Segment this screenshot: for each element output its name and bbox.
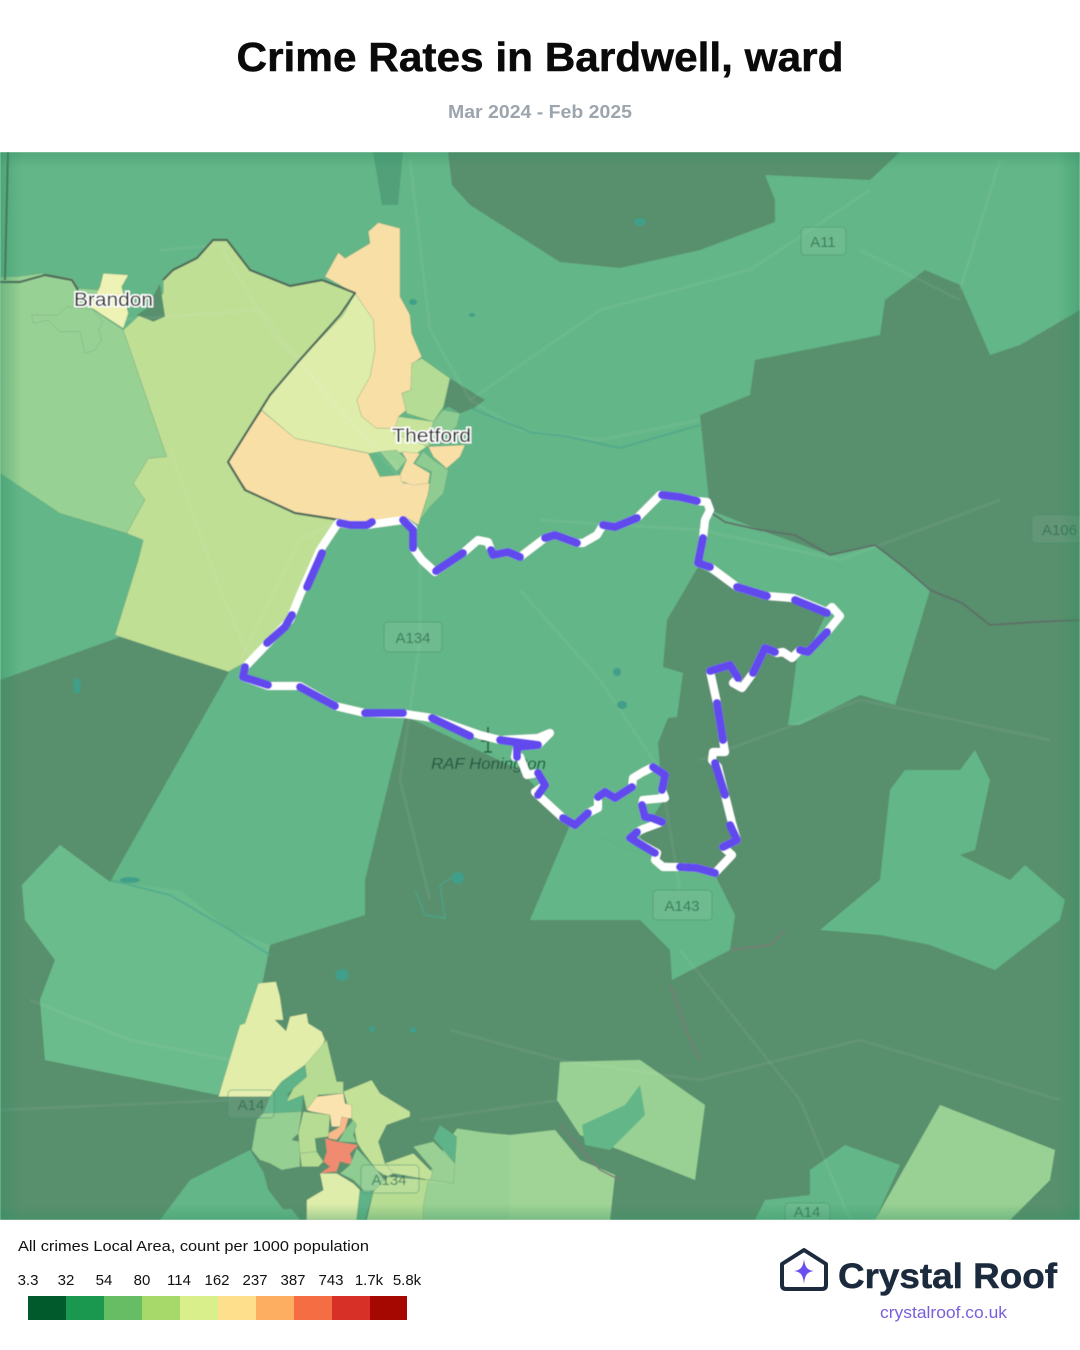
region: Thetford pale strip xyxy=(393,417,433,447)
legend: tick labels: 80 xyxy=(134,1272,150,1289)
region: Brandon town xyxy=(90,273,128,328)
road shield: A11: A11 xyxy=(810,234,836,251)
road shield: A134 south: A134 xyxy=(371,1172,407,1189)
region: Thetford east green xyxy=(402,358,450,422)
road shield: A11 xyxy=(801,227,846,255)
region: north-central dark area xyxy=(448,152,900,268)
road shield: A134 south xyxy=(361,1165,419,1193)
rivers xyxy=(110,408,700,955)
region: orange ward xyxy=(328,1117,348,1140)
panel: choropleth map xyxy=(0,152,1080,1231)
road shield: A134 north: A134 xyxy=(395,630,431,647)
place label: Brandon: Brandon xyxy=(74,290,153,311)
region: south-east medium patch xyxy=(755,1145,900,1220)
legend: tick labels: 1.7k xyxy=(355,1272,384,1289)
road shield: A106 xyxy=(1032,515,1080,543)
region: Thetford east medium xyxy=(415,452,448,520)
region: Stowmarket light patch xyxy=(557,1060,705,1180)
logo wordmark: Crystal Roof xyxy=(838,1257,1057,1296)
region: green small ward xyxy=(338,1120,357,1143)
region: east pale green xyxy=(343,1080,410,1177)
region: west medium xyxy=(252,1112,302,1170)
region: lower medium strip xyxy=(340,1148,387,1192)
county boundary lines xyxy=(0,152,1080,1180)
region: west light green xyxy=(0,273,167,533)
region: lower right green xyxy=(367,1177,428,1220)
region: south-west medium area xyxy=(110,670,405,946)
legend: tick labels: 3.3 xyxy=(18,1272,38,1289)
region: Brandon surrounding yellow green xyxy=(115,240,355,672)
road shield: A14 west xyxy=(228,1090,274,1118)
region: north pale yellow xyxy=(218,982,325,1097)
legend title: All crimes Local Area, count per 1000 population xyxy=(18,1238,369,1255)
title: Crime Rates in Bardwell, ward xyxy=(236,34,844,80)
region: central cream xyxy=(307,1093,352,1127)
region: east strip xyxy=(385,1153,433,1180)
region: east teal xyxy=(433,1125,457,1163)
subtitle: date range: Mar 2024 - Feb 2025 xyxy=(448,102,632,122)
place label: RAF Honington: RAF Honington xyxy=(431,756,546,773)
place label: Thetford: Thetford xyxy=(392,426,471,447)
region group: Thetford and Brandon xyxy=(0,223,485,672)
region: small north dark patch xyxy=(373,152,403,205)
ward boundary: white outline xyxy=(243,495,840,873)
region: red high-crime ward xyxy=(320,1138,358,1173)
roads: faint network xyxy=(0,160,1060,1220)
road shield: A14 east xyxy=(785,1203,830,1231)
road shield: A143: A143 xyxy=(664,898,700,915)
region: Brandon dark patch xyxy=(137,283,165,322)
region: dark blob xyxy=(260,1160,333,1209)
legend: tick labels: 32 xyxy=(58,1272,74,1289)
region: teal wedge xyxy=(263,1065,307,1117)
icon: airfield marker xyxy=(481,727,495,752)
region: middle light xyxy=(298,1112,330,1153)
region: south-west lighter area xyxy=(42,1002,228,1060)
road shield: A143 xyxy=(653,890,712,920)
region group: Bury St Edmunds xyxy=(218,982,510,1220)
region: southern light band xyxy=(426,1130,616,1220)
region: west Brandon outline parcel xyxy=(32,307,103,353)
road shield: A14 west: A14 xyxy=(238,1097,264,1114)
region: Thetford middle pale xyxy=(262,293,427,453)
region: Thetford inner cream xyxy=(400,452,430,485)
region: south-east light patch xyxy=(875,1105,1055,1220)
lakes xyxy=(73,218,646,1033)
ward boundary: purple dashes xyxy=(243,495,827,873)
region: lower middle light xyxy=(300,1152,323,1167)
legend: colour scale xyxy=(28,1296,407,1320)
icon: house with star xyxy=(782,1250,826,1289)
region: Thetford small cream xyxy=(428,445,465,468)
region: south medium patch xyxy=(160,1150,300,1220)
road shield: A14 east: A14 xyxy=(794,1204,820,1221)
legend: tick labels xyxy=(18,1272,422,1289)
logo url: crystalroof.co.uk xyxy=(880,1303,1008,1322)
region: Stowmarket inner patch xyxy=(582,1085,645,1150)
logo: Crystal Roof xyxy=(782,1250,1057,1322)
region: Thetford north-east green xyxy=(428,410,460,447)
region: central green xyxy=(287,1040,343,1110)
vignette: map edges xyxy=(0,152,1080,1220)
legend: tick labels: 387 xyxy=(280,1272,306,1289)
region: eastern medium patch xyxy=(820,750,1065,970)
region: east big light xyxy=(456,1128,482,1132)
legend: tick labels: 743 xyxy=(318,1272,344,1289)
region: lower teal strip xyxy=(357,1190,373,1220)
legend: tick labels: 5.8k xyxy=(393,1272,422,1289)
road shield: A134 north xyxy=(384,622,442,652)
legend: tick labels: 237 xyxy=(242,1272,268,1289)
region: Thetford south-west cream xyxy=(228,411,432,525)
region: Thetford dark patch xyxy=(443,378,485,413)
region: Thetford inner green xyxy=(380,450,407,472)
region: Thetford north cream xyxy=(325,223,422,428)
legend: tick labels: 114 xyxy=(167,1272,191,1289)
region: large southern and eastern dark area xyxy=(0,270,1080,1220)
legend: tick labels: 162 xyxy=(204,1272,230,1289)
region: east medium xyxy=(413,1142,455,1183)
region: lower pale xyxy=(307,1173,360,1220)
region: A143 medium area xyxy=(530,825,735,980)
road shield: A106: A106 xyxy=(1042,522,1077,539)
legend: tick labels: 54 xyxy=(96,1272,112,1289)
